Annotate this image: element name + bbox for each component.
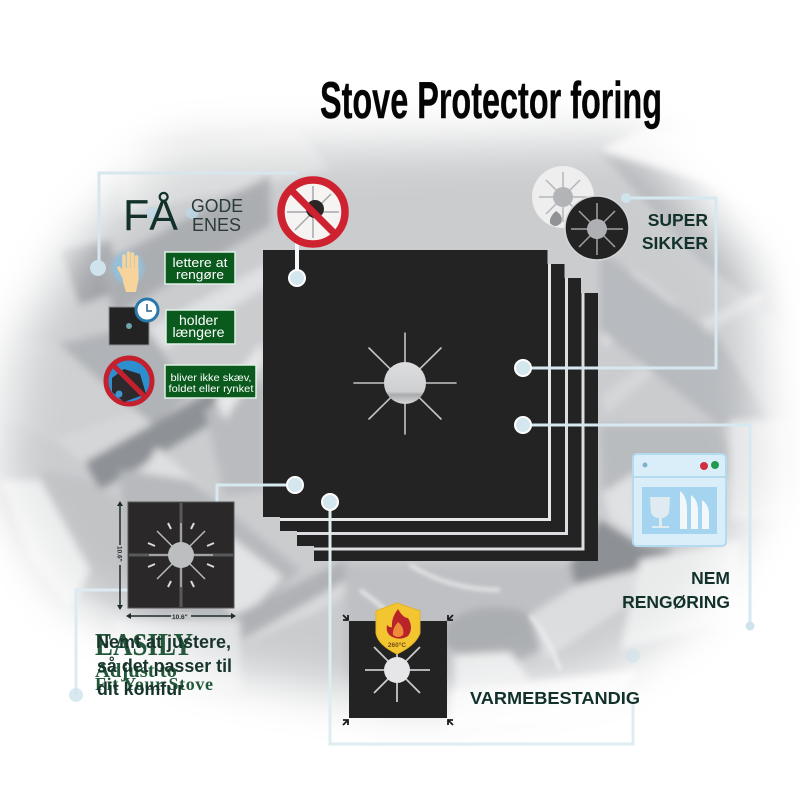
- corner arrows: [343, 615, 453, 725]
- label: lettere at rengøre: lettere at: [172, 255, 228, 270]
- text: ghosted English caption: Fit Your Stove: [95, 674, 213, 694]
- lower left band: [120, 470, 300, 625]
- text: Nemt at justere: dit komfur: [97, 679, 184, 699]
- heading: FÅ GODE ENES: FÅ: [123, 191, 179, 240]
- label: bliver ikke skæv: [165, 365, 256, 398]
- text: NEM RENGØRING: RENGØRING: [622, 592, 730, 612]
- label: holder længere: længere: [172, 324, 225, 340]
- icon: dishwasher: [633, 454, 726, 546]
- text: ghosted English caption: Adjust to: [95, 660, 177, 682]
- icon: no-wrinkle burner prohibition: [281, 180, 345, 244]
- icon: heat resistant sheet: [343, 603, 453, 725]
- text: Nemt at justere: så det passer til: [97, 656, 232, 676]
- icon: sheet with clock: [109, 299, 158, 345]
- bright curved highlights: [360, 565, 560, 670]
- heading: FÅ GODE ENES: [123, 191, 243, 240]
- label: bliver ikke skæv: foldet eller rynket: [168, 383, 254, 395]
- icon: adjustable sheet with dimensions: 10.6": [116, 546, 122, 562]
- text: SUPER SIKKER: SUPER: [648, 210, 708, 230]
- burner cutout with rays: [354, 333, 456, 434]
- upper left bands: [124, 150, 323, 210]
- label: holder længere: [166, 310, 235, 344]
- icon: no warping prohibition: [106, 358, 152, 404]
- text: Nemt at justere: Nemt at justere,: [96, 632, 231, 652]
- text: NEM RENGØRING: [622, 568, 730, 612]
- below stack: [345, 565, 600, 680]
- heading: FÅ GODE ENES: GODE: [191, 195, 243, 216]
- heading: FÅ GODE ENES: ENES: [192, 214, 241, 235]
- text: NEM RENGØRING: NEM: [691, 568, 730, 588]
- icon: burner discs: [532, 166, 629, 260]
- label: bliver ikke skæv: bliver ikke skæv,: [170, 372, 252, 384]
- text: ghosted English caption: [95, 626, 213, 694]
- text: ghosted English caption: EASILY: [95, 626, 193, 662]
- icon: adjustable sheet with dimensions: [116, 501, 236, 621]
- text: VARMEBESTANDIG: VARMEBESTANDIG: [470, 688, 640, 708]
- text: SUPER SIKKER: [642, 210, 708, 253]
- label: holder længere: holder: [179, 312, 218, 328]
- label: lettere at rengøre: [165, 252, 235, 284]
- connector lines: [69, 173, 754, 744]
- icon: adjustable sheet with dimensions: 10.6": [172, 614, 188, 621]
- background: blurred stove photo: [0, 118, 784, 726]
- icon: hand wiping: [112, 252, 144, 292]
- panel: stacked stove protector sheets: [263, 250, 598, 561]
- icon: flame shield: 260°C: [388, 641, 406, 649]
- label: lettere at rengøre: rengøre: [176, 267, 224, 282]
- right side: [598, 150, 790, 330]
- text: SUPER SIKKER: SIKKER: [642, 233, 708, 253]
- text: Nemt at justere: [96, 632, 232, 699]
